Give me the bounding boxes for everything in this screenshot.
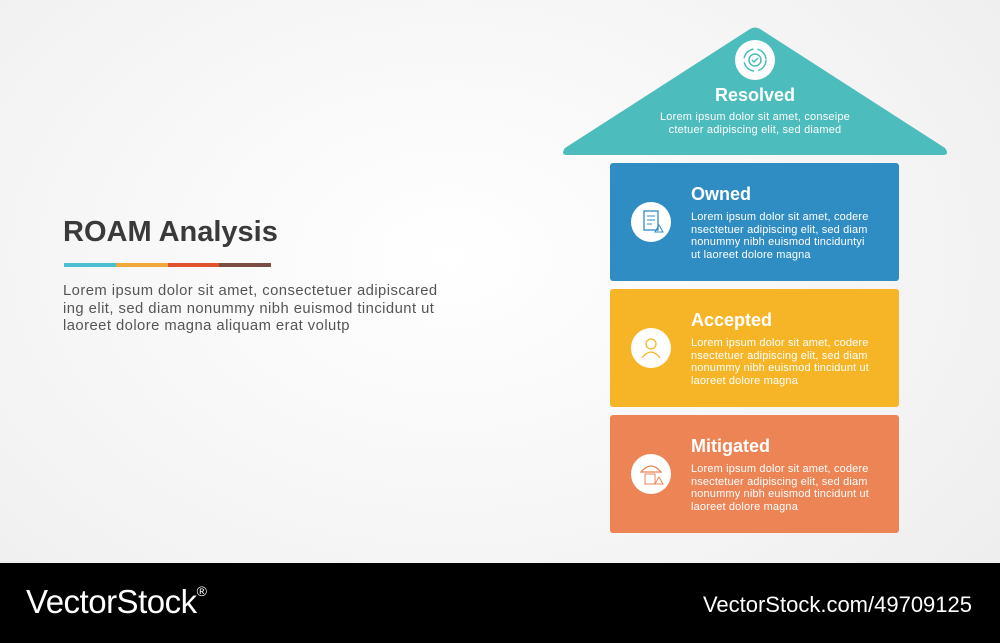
panel: accepted: Accepted bbox=[691, 310, 772, 330]
panel: mitigated: Lorem ipsum dolor sit amet, codere bbox=[691, 463, 869, 475]
description text: laoreet dolore magna aliquam erat volutp bbox=[63, 318, 350, 334]
panel: owned: nsectetuer adipiscing elit, sed diam bbox=[691, 224, 868, 236]
panel: mitigated: Mitigated bbox=[691, 436, 770, 456]
icon: resolved bbox=[735, 40, 775, 80]
description text bbox=[63, 283, 438, 334]
description text: Lorem ipsum dolor sit amet, consectetuer adipiscared bbox=[63, 283, 438, 299]
panel: owned: Lorem ipsum dolor sit amet, codere bbox=[691, 211, 869, 223]
panel: mitigated: laoreet dolore magna bbox=[691, 501, 798, 513]
heading: resolved: Resolved bbox=[715, 85, 795, 105]
title: ROAM Analysis bbox=[63, 216, 278, 248]
panel: mitigated bbox=[610, 415, 899, 533]
footer logo: VectorStock® bbox=[26, 583, 206, 620]
text: resolved: Lorem ipsum dolor sit amet, conseipe bbox=[660, 111, 850, 123]
icon: mitigated bbox=[631, 454, 671, 494]
icon: accepted bbox=[631, 328, 671, 368]
roof: resolved bbox=[562, 28, 948, 155]
panel: accepted: Lorem ipsum dolor sit amet, codere bbox=[691, 337, 869, 349]
panel: mitigated: nonummy nibh euismod tincidunt ut bbox=[691, 488, 869, 500]
colored underline bbox=[64, 263, 271, 267]
text: resolved bbox=[660, 111, 850, 136]
icon: owned bbox=[631, 202, 671, 242]
panel: accepted bbox=[610, 289, 899, 407]
panel: owned: nonummy nibh euismod tinciduntyi bbox=[691, 236, 865, 248]
panel: owned bbox=[610, 163, 899, 281]
panel: owned: ut laoreet dolore magna bbox=[691, 249, 811, 261]
panel: accepted: nsectetuer adipiscing elit, sed diam bbox=[691, 350, 868, 362]
panel: accepted: nonummy nibh euismod tincidunt ut bbox=[691, 362, 869, 374]
panel: mitigated: nsectetuer adipiscing elit, sed diam bbox=[691, 476, 868, 488]
footer bar bbox=[0, 563, 1000, 643]
description text: ing elit, sed diam nonummy nibh euismod tincidunt ut bbox=[63, 300, 434, 316]
panel: owned: Owned bbox=[691, 184, 751, 204]
text: resolved: ctetuer adipiscing elit, sed diamed bbox=[669, 124, 841, 136]
panel: accepted: laoreet dolore magna bbox=[691, 375, 798, 387]
footer url: VectorStock.com/49709125 bbox=[703, 592, 972, 617]
